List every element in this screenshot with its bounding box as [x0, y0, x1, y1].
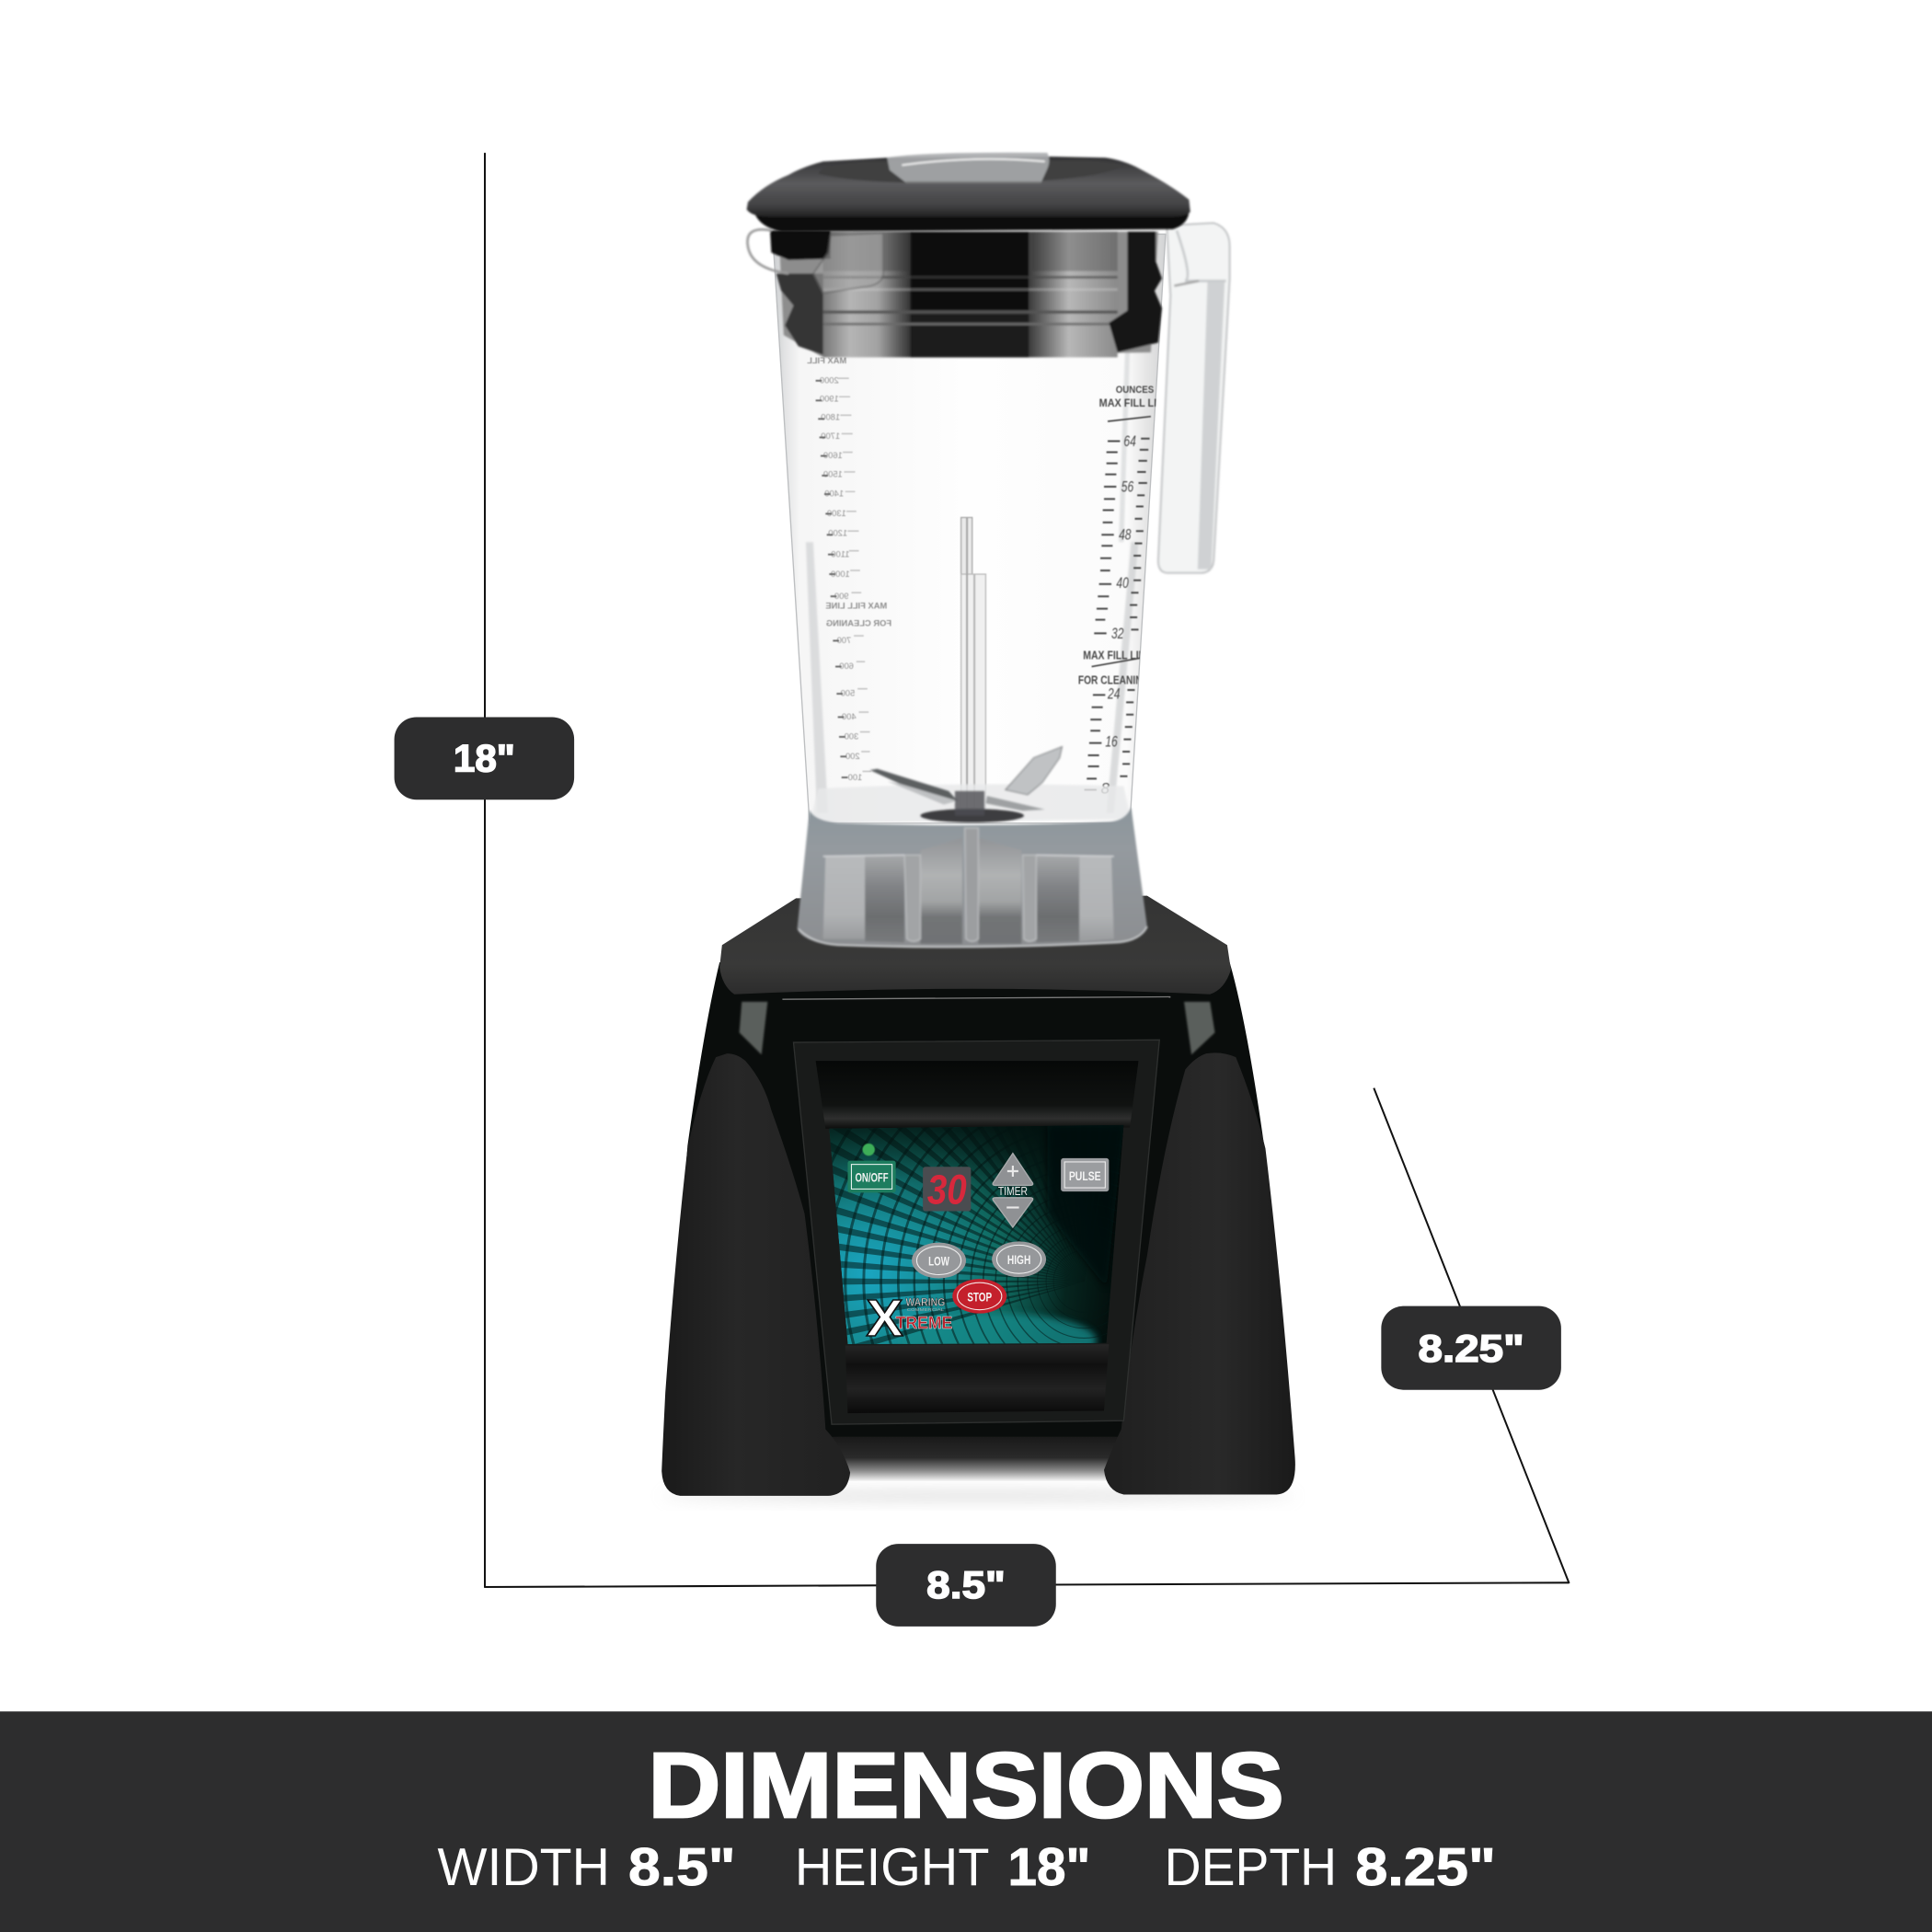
- label: height 18 inches: 18": [454, 736, 515, 779]
- banner height spec: [795, 1838, 1090, 1897]
- timer buttons: [993, 1154, 1033, 1227]
- left mirrored measurement scale: 500: [841, 689, 855, 698]
- height dimension line: [484, 153, 486, 1588]
- left mirrored measurement scale: 200: [845, 752, 860, 761]
- label: depth 8.25 inches: [1381, 1306, 1561, 1390]
- left mirrored measurement scale: MAX FILL LINE: [825, 602, 887, 611]
- pulse button: PULSE: [1069, 1169, 1101, 1183]
- right measurement scale: 40: [1116, 574, 1129, 592]
- left mirrored measurement scale: 1300: [827, 509, 846, 518]
- jar body: [773, 234, 1166, 823]
- left mirrored measurement scale: 1800: [821, 413, 840, 422]
- jar handle: [1158, 223, 1230, 573]
- stop button: [952, 1279, 1006, 1314]
- clear lid cap: [887, 153, 1049, 182]
- high button: [992, 1241, 1046, 1277]
- control panel frame: [793, 1040, 1159, 1424]
- right measurement scale: 32: [1111, 625, 1124, 642]
- xtreme logo: X: [867, 1289, 903, 1347]
- width dimension line: [484, 1582, 1570, 1587]
- blender base: [661, 896, 1295, 1496]
- right measurement scale: 8: [1101, 779, 1110, 797]
- motor housing: [672, 962, 1282, 1442]
- banner width spec: [437, 1838, 736, 1897]
- left mirrored measurement scale: 300: [845, 732, 858, 742]
- banner height spec: HEIGHT: [795, 1838, 989, 1897]
- left mirrored measurement scale: 600: [839, 661, 854, 671]
- left mirrored measurement scale: 100: [848, 773, 862, 782]
- right measurement scale: OUNCES: [1116, 385, 1155, 396]
- jar floor rim: [810, 784, 1131, 823]
- bottom banner: [0, 1711, 1932, 1932]
- label: height 18 inches: [395, 717, 574, 799]
- right measurement scale: [1078, 385, 1156, 794]
- left mirrored measurement scale: 1700: [821, 431, 840, 441]
- panel background mesh: [830, 1125, 1124, 1344]
- label: depth 8.25 inches: 8.25": [1419, 1327, 1524, 1370]
- low button: LOW: [928, 1254, 949, 1268]
- timer display: 30: [927, 1166, 967, 1213]
- shoulder highlights: [740, 1002, 767, 1054]
- right measurement scale: 64: [1123, 432, 1136, 450]
- floor shadow: [661, 1491, 1296, 1501]
- left mirrored measurement scale: 1900: [820, 395, 839, 404]
- blender lid: [747, 153, 1190, 232]
- left mirrored measurement scale: 1000: [831, 569, 850, 579]
- left mirrored measurement scale: 1200: [828, 529, 847, 538]
- xtreme logo: TREME: [896, 1313, 952, 1332]
- label: width 8.5 inches: [876, 1544, 1056, 1627]
- right measurement scale: MAX FILL LINE: [1099, 397, 1170, 409]
- banner depth spec: DEPTH: [1165, 1838, 1337, 1897]
- right measurement scale: 48: [1119, 526, 1132, 544]
- frame recess bottom: [845, 1344, 1109, 1413]
- low button: [912, 1243, 966, 1279]
- banner depth spec: 8.25": [1355, 1838, 1496, 1897]
- blender jar: [747, 229, 1170, 947]
- xtreme logo: WARING: [905, 1296, 945, 1309]
- on/off button: [847, 1161, 896, 1192]
- banner depth spec: [1165, 1838, 1496, 1897]
- on/off button: ON/OFF: [855, 1170, 889, 1184]
- banner height spec: 18": [1008, 1838, 1090, 1897]
- jar collar: [798, 807, 1147, 947]
- jar wall streaks: [806, 351, 1139, 813]
- center shaft: [961, 517, 985, 809]
- right measurement scale: 24: [1107, 684, 1120, 702]
- left mirrored measurement scale: 700: [837, 636, 851, 645]
- high button: HIGH: [1007, 1253, 1030, 1267]
- blender product photo: [661, 153, 1364, 1561]
- shadow gap between feet: [820, 1430, 1127, 1481]
- xtreme logo: COMMERCIAL: [907, 1307, 944, 1312]
- right measurement scale: 16: [1105, 733, 1118, 751]
- inner lid plug seen through jar: [747, 229, 1162, 357]
- left mirrored measurement scale: 2000: [820, 376, 839, 385]
- left foot: [661, 1053, 850, 1496]
- right measurement scale: FOR CLEANING: [1078, 673, 1150, 686]
- left mirrored measurement scale: 1400: [824, 489, 844, 499]
- frame recess top: [816, 1061, 1139, 1129]
- banner title: DIMENSIONS: [648, 1734, 1284, 1837]
- left mirrored measurement scale: [807, 356, 891, 782]
- pulse button: [1061, 1158, 1109, 1191]
- left mirrored measurement scale: 1600: [823, 451, 843, 460]
- left mirrored measurement scale: 900: [834, 592, 849, 601]
- right foot: [1104, 1052, 1295, 1495]
- right measurement scale: 56: [1121, 477, 1134, 495]
- xtreme logo: [867, 1289, 952, 1347]
- left mirrored measurement scale: 1500: [823, 469, 843, 478]
- label: width 8.5 inches: 8.5": [926, 1563, 1006, 1606]
- base top pad: [719, 896, 1231, 995]
- stop button: STOP: [967, 1290, 992, 1304]
- power LED: [863, 1144, 875, 1156]
- blade assembly: [870, 747, 1062, 822]
- left mirrored measurement scale: 400: [842, 712, 857, 721]
- right measurement scale: MAX FILL LINE: [1083, 649, 1152, 662]
- left mirrored measurement scale: 1100: [831, 549, 849, 558]
- control panel: [830, 1125, 1124, 1344]
- left mirrored measurement scale: MAX FILL: [807, 356, 846, 365]
- depth dimension line: [1374, 1088, 1570, 1583]
- timer buttons: TIMER: [998, 1184, 1028, 1198]
- banner width spec: 8.5": [628, 1838, 736, 1897]
- banner width spec: WIDTH: [437, 1838, 610, 1897]
- left mirrored measurement scale: FOR CLEANING: [826, 618, 891, 627]
